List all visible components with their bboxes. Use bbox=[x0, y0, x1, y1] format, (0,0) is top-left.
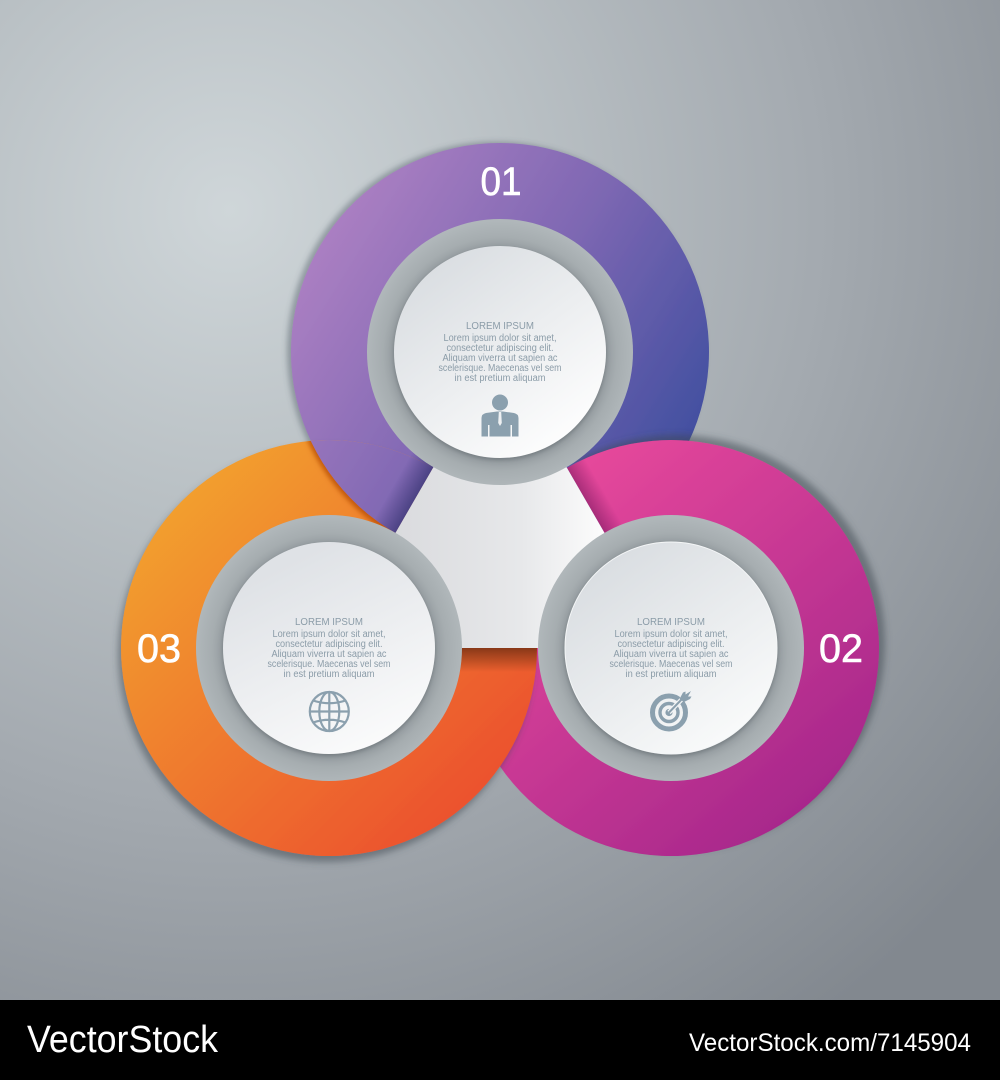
text block 01: scelerisque. Maecenas vel sem bbox=[438, 363, 562, 374]
text block 01 bbox=[438, 333, 562, 384]
icon: businessman bbox=[482, 394, 518, 436]
ring 02 magenta bbox=[463, 440, 879, 856]
footer url: VectorStock.com/7145904 bbox=[689, 1029, 971, 1057]
number 02: 02 bbox=[819, 627, 863, 671]
heading 03: LOREM IPSUM bbox=[295, 616, 363, 628]
text block 02: scelerisque. Maecenas vel sem bbox=[610, 659, 732, 670]
text block 03 bbox=[268, 629, 390, 680]
ring 01 purple overlap over orange bbox=[306, 440, 433, 533]
text block 03: scelerisque. Maecenas vel sem bbox=[268, 659, 390, 670]
text block 01: Lorem ipsum dolor sit amet, bbox=[444, 333, 556, 344]
text block 01: in est pretium aliquam bbox=[454, 373, 546, 384]
text block 01: Aliquam viverra ut sapien ac bbox=[442, 353, 558, 364]
heading 02: LOREM IPSUM bbox=[637, 616, 705, 628]
panel 01 bbox=[367, 219, 633, 485]
ring 01 purple base bbox=[291, 143, 709, 533]
text block 03: Lorem ipsum dolor sit amet, bbox=[272, 629, 386, 640]
text block 03: consectetur adipiscing elit. bbox=[276, 639, 382, 650]
text block 02: in est pretium aliquam bbox=[626, 669, 716, 680]
heading 01: LOREM IPSUM bbox=[466, 320, 534, 332]
text block 03: in est pretium aliquam bbox=[284, 669, 374, 680]
text block 02: consectetur adipiscing elit. bbox=[618, 639, 724, 650]
icon: globe bbox=[310, 692, 349, 731]
text block 02: Lorem ipsum dolor sit amet, bbox=[614, 629, 728, 640]
number 01: 01 bbox=[480, 160, 522, 204]
text block 02 bbox=[610, 629, 732, 680]
number 03: 03 bbox=[137, 627, 181, 671]
text block 03: Aliquam viverra ut sapien ac bbox=[272, 649, 387, 660]
purple cut edge shading bbox=[378, 455, 434, 533]
footer bar bbox=[0, 1000, 1000, 1080]
panel 03 bbox=[196, 515, 462, 781]
icon: target bbox=[652, 691, 692, 729]
ring 03 orange bbox=[121, 440, 545, 856]
text block 01: consectetur adipiscing elit. bbox=[446, 343, 554, 354]
footer logo: VectorStock bbox=[27, 1019, 219, 1061]
center triangle bbox=[329, 352, 671, 648]
panel 02 bbox=[538, 515, 804, 781]
text block 02: Aliquam viverra ut sapien ac bbox=[614, 649, 729, 660]
